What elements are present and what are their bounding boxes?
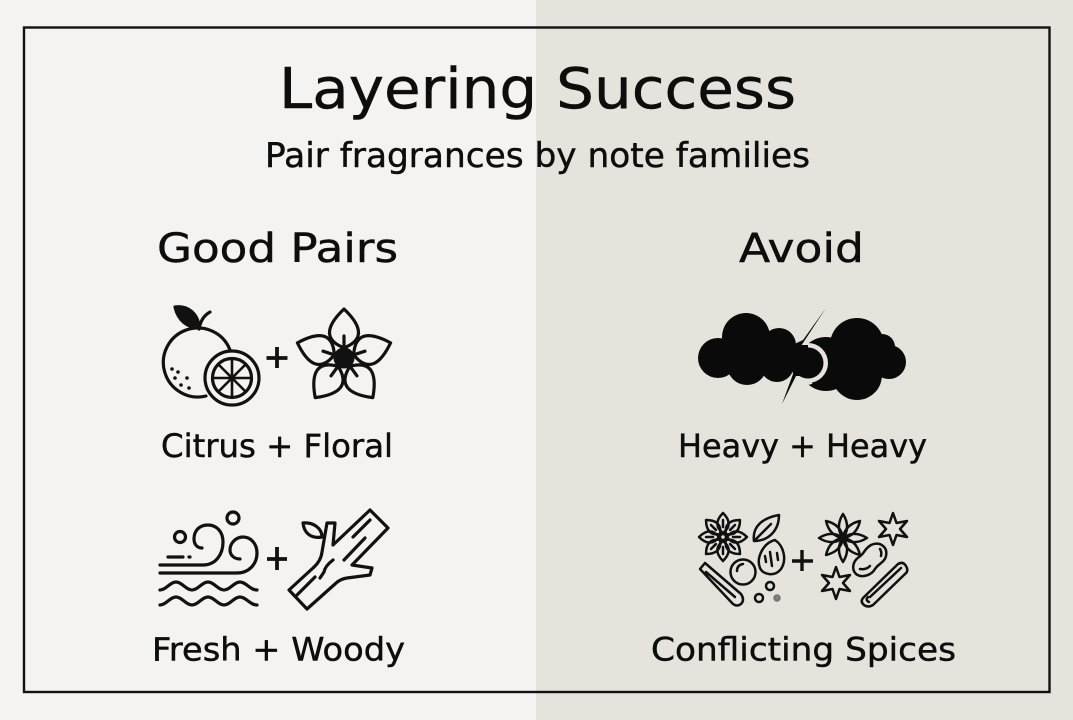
heading: avoid: Avoid (739, 226, 864, 272)
subtitle: Pair fragrances by note families (265, 136, 810, 176)
cinnamon stick (700, 563, 743, 606)
star anise dark (819, 514, 867, 562)
label: fresh + woody: Fresh + Woody (152, 630, 405, 668)
label: heavy + heavy: Heavy + Heavy (678, 427, 927, 465)
plus: fresh and woody (267, 547, 287, 570)
cinnamon stick (862, 563, 907, 606)
icon: mixed spices left (699, 513, 784, 606)
plus: citrus and floral (266, 347, 288, 368)
icon: citrus fruit (163, 307, 259, 405)
round seed (730, 560, 756, 584)
plus: conflicting spices (792, 550, 813, 571)
title: Layering Success (279, 57, 796, 122)
heading: good pairs: Good Pairs (157, 226, 398, 272)
nut (759, 540, 784, 574)
star anise (699, 513, 747, 561)
icon: mixed spices right (819, 513, 907, 606)
panel: right background (536, 0, 1073, 720)
label: conflicting spices: Conflicting Spices (651, 630, 956, 668)
icon: dark storm clouds (698, 308, 906, 404)
panel: left background (0, 0, 536, 720)
bay leaf (754, 515, 779, 541)
peanut (853, 544, 886, 576)
label: citrus + floral: Citrus + Floral (161, 427, 393, 465)
icon: flower (293, 309, 395, 406)
small seeds (766, 582, 774, 590)
icon: wind and waves (160, 512, 257, 605)
icon: wood branch (289, 510, 388, 609)
small star bottom (822, 567, 850, 599)
small star top (879, 513, 907, 545)
